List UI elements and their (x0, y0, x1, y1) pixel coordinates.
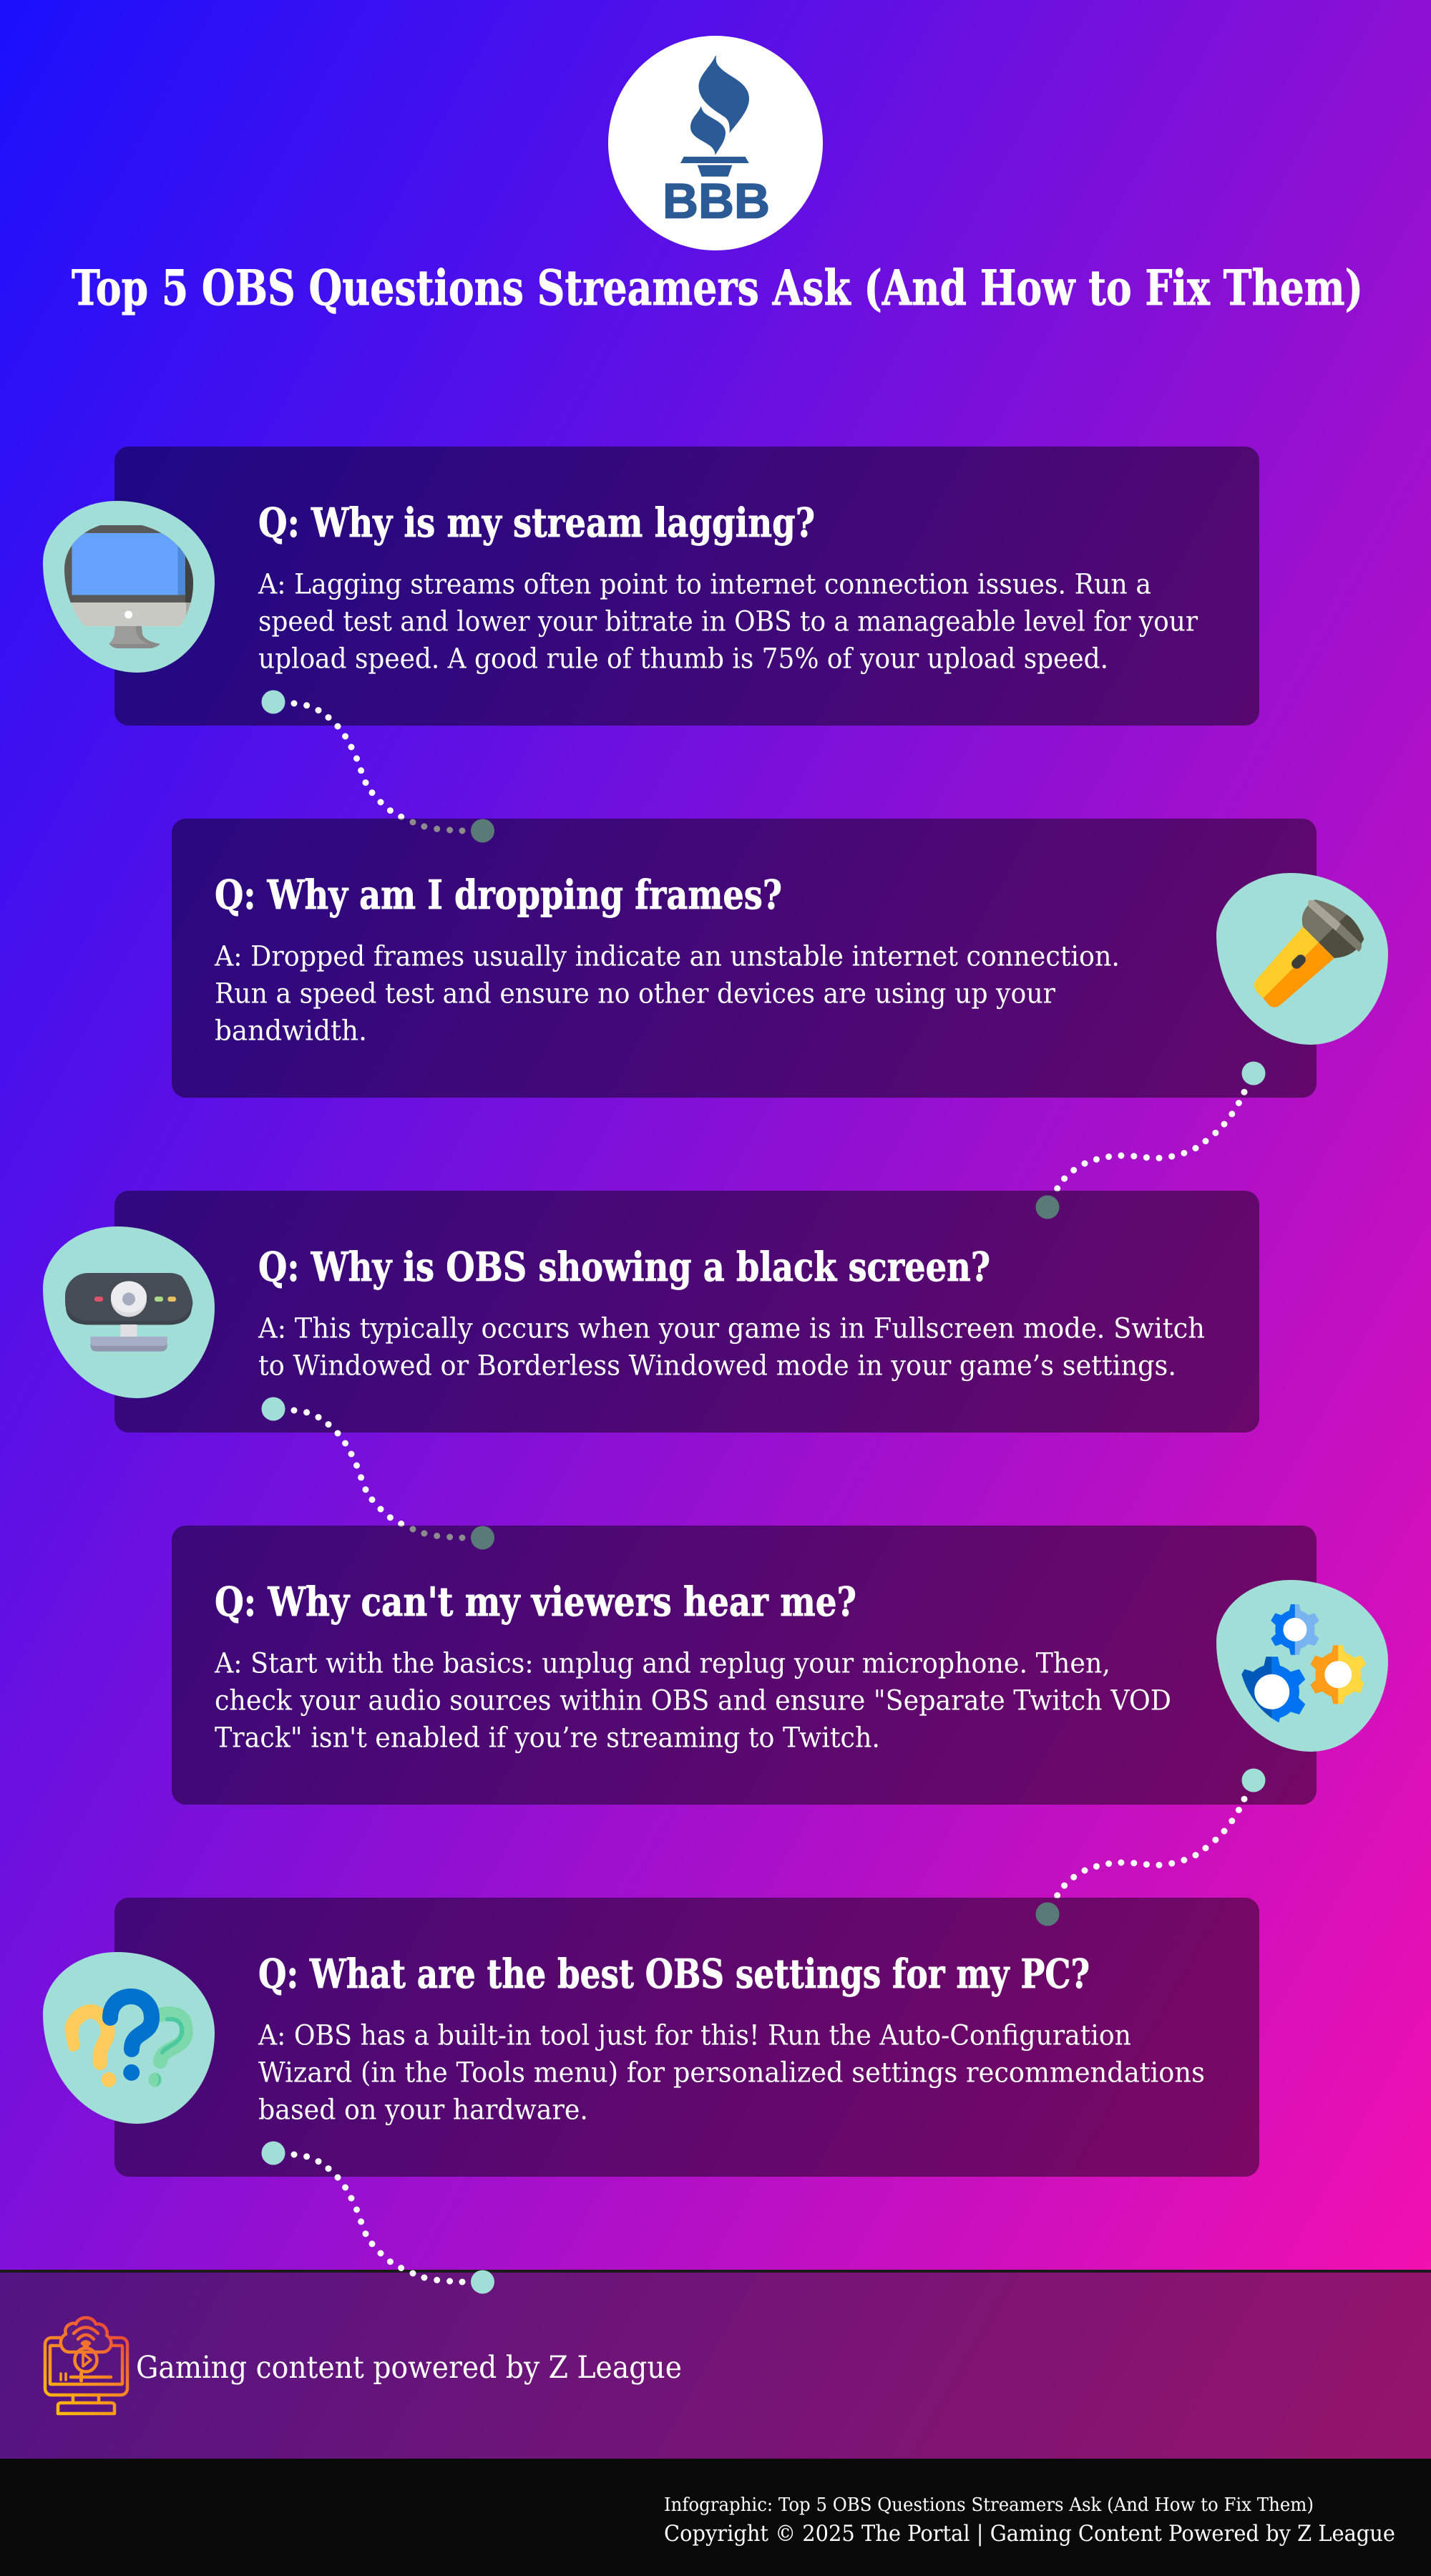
answer text: Wizard (in the Tools menu) for personalized settings recommendations (258, 2057, 1205, 2089)
connector 1 (262, 690, 494, 843)
panel: question 3 (43, 1191, 1259, 1433)
answer text (258, 1313, 1205, 1382)
answer text: bandwidth. (215, 1015, 367, 1048)
answer text: A: Start with the basics: unplug and replug your microphone. Then, (214, 1648, 1110, 1680)
footer band (0, 2270, 1431, 2459)
panel: question 2 (172, 819, 1388, 1098)
answer text: A: Dropped frames usually indicate an unstable internet connection. (214, 941, 1120, 973)
icon: desktop monitor (63, 525, 194, 648)
answer text: speed test and lower your bitrate in OBS to a manageable level for your (258, 606, 1198, 638)
answer text: upload speed. A good rule of thumb is 75% of your upload speed. (258, 643, 1108, 675)
black footer (0, 2459, 1431, 2576)
icon: torch flame (680, 56, 749, 177)
answer text: Track" isn't enabled if you’re streaming to Twitch. (215, 1722, 880, 1755)
answer text (214, 941, 1120, 1048)
answer text: A: Lagging streams often point to internet connection issues. Run a (258, 569, 1151, 601)
footer line 2: Copyright © 2025 The Portal | Gaming Content Powered by Z League (664, 2521, 1395, 2547)
icon: streaming monitor with cloud (45, 2318, 127, 2414)
panel: question 5 (43, 1898, 1259, 2177)
connector 5 (262, 2141, 494, 2294)
answer text: A: This typically occurs when your game is in Fullscreen mode. Switch (258, 1313, 1205, 1345)
answer text: check your audio sources within OBS and ensure "Separate Twitch VOD (215, 1685, 1171, 1717)
question heading: Q: What are the best OBS settings for my PC? (258, 1951, 1090, 1998)
footer tagline: Gaming content powered by Z League (136, 2350, 682, 2386)
icon: flashlight (1254, 899, 1364, 1008)
header: BBB logo (608, 36, 823, 250)
icon: question marks (72, 1996, 187, 2087)
answer text (214, 1648, 1171, 1755)
question heading: Q: Why is my stream lagging? (258, 499, 815, 547)
logo wordmark: BBB (663, 173, 770, 229)
connector 2 (1036, 1062, 1265, 1219)
icon blob 4 (1216, 1580, 1388, 1752)
connector 4 (1036, 1769, 1265, 1926)
answer text: based on your hardware. (258, 2094, 588, 2127)
panel: question 1 (43, 447, 1259, 726)
answer text (258, 569, 1198, 675)
icon: webcam (65, 1273, 192, 1352)
question heading: Q: Why is OBS showing a black screen? (258, 1244, 990, 1291)
connector 3 (262, 1397, 494, 1550)
question heading: Q: Why am I dropping frames? (215, 872, 782, 919)
icon blob 2 (1216, 873, 1388, 1045)
footer line 1: Infographic: Top 5 OBS Questions Streamers Ask (And How to Fix Them) (664, 2494, 1314, 2516)
answer text: to Windowed or Borderless Windowed mode in your game’s settings. (258, 1350, 1176, 1382)
answer text (258, 2020, 1205, 2127)
question heading: Q: Why can't my viewers hear me? (215, 1579, 856, 1626)
answer text: A: OBS has a built-in tool just for this! Run the Auto-Configuration (258, 2020, 1131, 2052)
icon blob 5 (43, 1952, 215, 2124)
panel: question 4 (172, 1526, 1388, 1805)
icon blob 1 (43, 501, 215, 673)
icon blob 3 (43, 1226, 215, 1398)
icon: gears (1237, 1604, 1367, 1727)
answer text: Run a speed test and ensure no other devices are using up your (215, 978, 1055, 1010)
